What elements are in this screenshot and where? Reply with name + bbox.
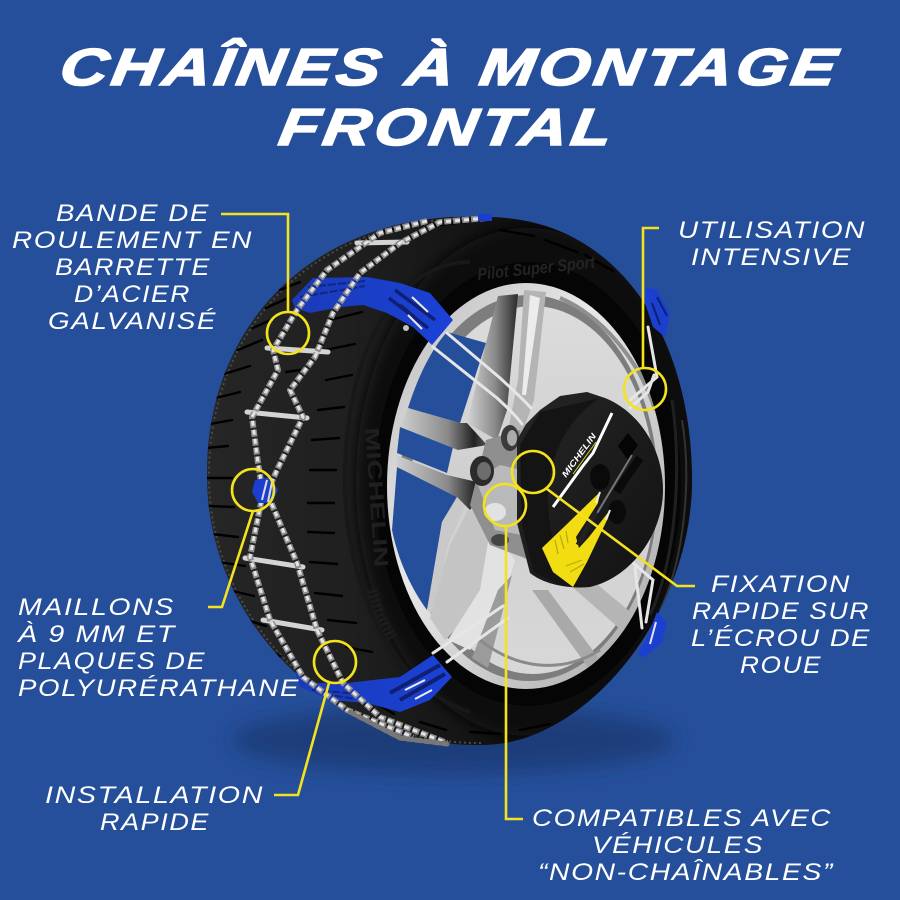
chain lines: [250, 218, 487, 743]
callout: maillons: POLYURÉRATHANE: [18, 675, 300, 702]
callout: fixation rapide: L’ÉCROU DE: [691, 625, 871, 652]
tire: [206, 217, 700, 745]
blue chain connector: [252, 477, 278, 503]
blue top connector: [478, 214, 492, 221]
callout: maillons: [17, 469, 300, 702]
mounting device: [517, 392, 663, 587]
spokes: [467, 294, 518, 440]
cross bars: [245, 242, 407, 630]
shoulder band: [422, 260, 470, 712]
callout: maillons: À 9 MM ET: [17, 621, 177, 648]
polyurethane plate: bottom: [295, 655, 452, 712]
callout: installation rapide: [45, 641, 356, 836]
callout: utilisation intensive: INTENSIVE: [691, 244, 852, 271]
callout: fixation rapide: [512, 451, 871, 679]
callout: maillons: MAILLONS: [18, 594, 175, 621]
callout: utilisation intensive: UTILISATION: [678, 217, 866, 244]
callout: installation rapide: RAPIDE: [100, 809, 210, 836]
callout: maillons: PLAQUES DE: [18, 648, 206, 675]
tread edge highlight: [209, 219, 483, 743]
callout: compatibles: [484, 484, 834, 886]
ground shadow: [231, 706, 675, 774]
spoke openings: [408, 332, 486, 423]
logo: MICHELIN: [560, 430, 599, 479]
device slots: [618, 433, 638, 460]
callout: utilisation intensive: [624, 217, 866, 410]
callout: bande de roulement: BARRETTE: [55, 254, 211, 281]
callout: compatibles: VÉHICULES: [592, 832, 764, 859]
title: [56, 38, 844, 157]
wires to hub: [433, 327, 657, 662]
callout: bande de roulement: GALVANISÉ: [48, 308, 217, 335]
callout: fixation rapide: ROUE: [740, 652, 822, 679]
tire: MICHELIN: [360, 427, 392, 568]
tread sipes: [206, 222, 613, 734]
callout: installation rapide: INSTALLATION: [45, 782, 264, 809]
device body: [517, 392, 663, 587]
callout: fixation rapide: FIXATION: [711, 571, 851, 598]
callout: bande de roulement: ROULEMENT EN: [12, 227, 253, 254]
hub and nuts: [470, 430, 530, 560]
white swoosh: [553, 413, 612, 507]
title: CHAÎNES À MONTAGE: [56, 38, 844, 97]
callout: bande de roulement: [12, 200, 309, 354]
snow chains: [245, 218, 487, 744]
callout: compatibles: “NON-CHAÎNABLES”: [538, 859, 834, 886]
alloy rim: [387, 283, 665, 689]
polyurethane clips: right: [638, 287, 670, 658]
callout: fixation rapide: RAPIDE SUR: [692, 598, 870, 625]
polyurethane plate: top: [292, 277, 453, 345]
yellow tool: [542, 492, 610, 587]
callout: bande de roulement: D’ACIER: [74, 281, 191, 308]
callout: bande de roulement: BANDE DE: [56, 200, 210, 227]
callout: compatibles: COMPATIBLES AVEC: [532, 805, 832, 832]
chain link over connector: [262, 480, 272, 502]
illustration: wheel with snow chains: [206, 214, 700, 745]
sidewall text: Pilot Super Sport: [476, 253, 597, 284]
title: FRONTAL: [275, 99, 620, 157]
